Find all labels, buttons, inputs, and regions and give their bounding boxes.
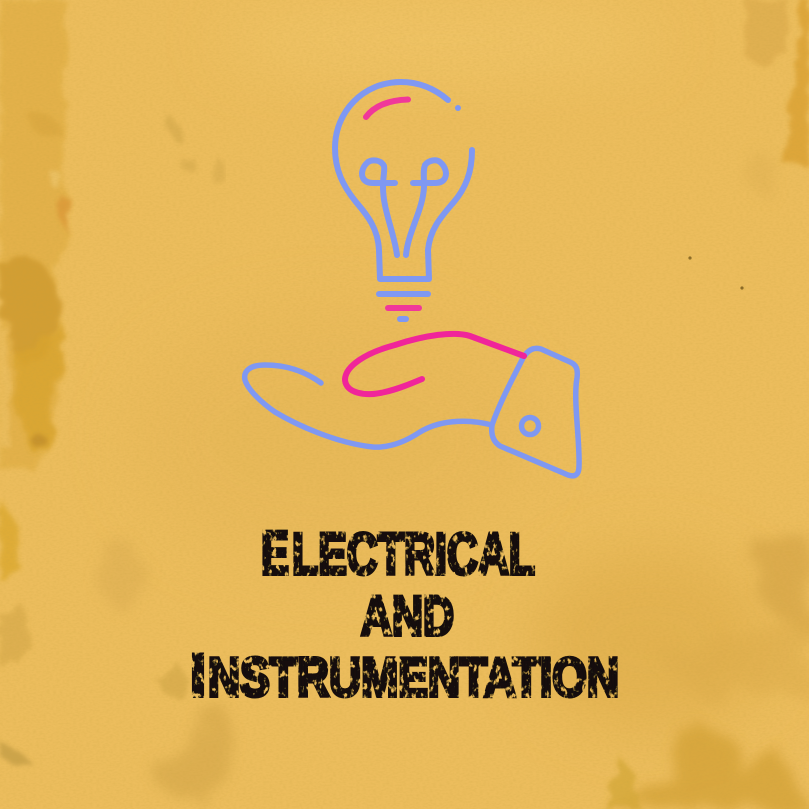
- icon: light bulb: [335, 82, 472, 319]
- title line 2: AND: [361, 584, 454, 647]
- stains: right edge: [605, 0, 809, 809]
- title line 1: E: [261, 519, 289, 587]
- cuff: [492, 348, 579, 476]
- stains: left edge: [0, 0, 70, 764]
- title line 3: NSTRUMENTATION: [208, 646, 619, 708]
- bulb filaments: [362, 160, 397, 255]
- title line 1: LECTRICAL: [292, 522, 535, 587]
- title line 1: [261, 519, 535, 587]
- highlight dot: [455, 105, 461, 111]
- cuff button: [522, 418, 538, 434]
- base pink line: [388, 305, 419, 311]
- bulb pink highlight: [366, 100, 408, 117]
- stains: interior and bottom: [100, 112, 744, 800]
- title line 3: I: [190, 642, 206, 709]
- base line: [379, 291, 428, 297]
- thumb and palm underside: [245, 365, 492, 447]
- bulb glass and neck: [335, 82, 472, 279]
- icon: open hand with cuff: [245, 334, 579, 476]
- base tip: [400, 316, 406, 322]
- title: [190, 519, 619, 709]
- pink finger: [345, 334, 524, 394]
